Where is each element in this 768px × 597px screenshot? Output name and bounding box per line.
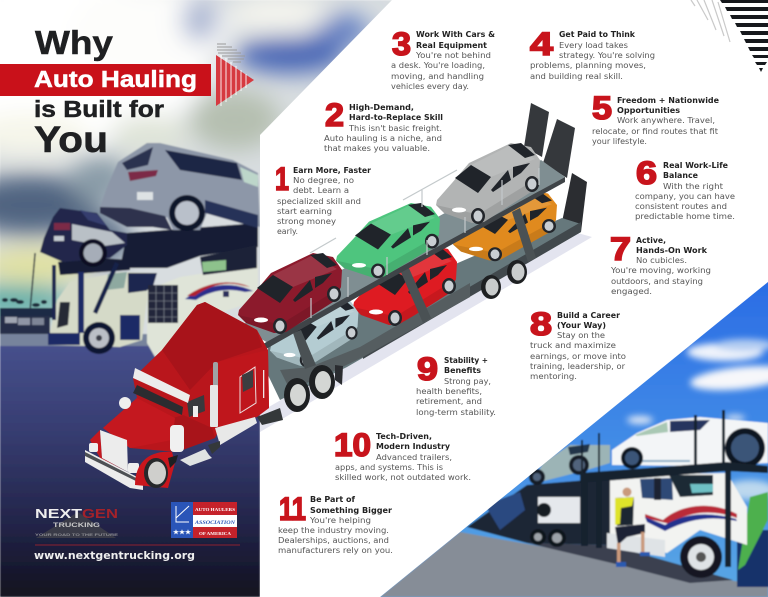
item 7: 7 xyxy=(610,231,631,267)
tractor rear frame xyxy=(280,208,536,412)
orange car xyxy=(453,190,557,261)
logo: NextGen Trucking: NEXT xyxy=(35,506,82,521)
item 4: and building real skill. xyxy=(530,72,623,81)
photo: car hauler under a cloudy sky xyxy=(0,0,400,597)
item 9 xyxy=(416,351,496,417)
item 11: Dealerships, auctions, and xyxy=(278,536,389,545)
red semi tractor xyxy=(85,302,283,490)
ground shadow xyxy=(260,232,592,432)
ground xyxy=(0,345,260,597)
logo: Auto Haulers Association of America: ASSOCIATION xyxy=(194,521,236,526)
item 1: 1 xyxy=(275,161,289,197)
upper ramps xyxy=(524,103,575,178)
item 6: Balance xyxy=(663,171,699,180)
horizon with palms xyxy=(0,253,60,318)
item 8: 8 xyxy=(530,306,552,342)
item 1: Earn More, Faster xyxy=(293,166,371,175)
item 7: You're moving, working xyxy=(610,266,711,275)
item 6: With the right xyxy=(663,182,723,191)
logo: Auto Haulers Association of America: OF AMERICA xyxy=(199,531,232,536)
left trailer xyxy=(467,478,612,547)
trailer wheels xyxy=(481,260,527,299)
heading: You: You xyxy=(34,119,108,160)
item 2: Hard-to-Replace Skill xyxy=(349,113,443,122)
item 4: strategy. You're solving xyxy=(559,51,655,60)
green car xyxy=(336,203,440,278)
item 7: Hands-On Work xyxy=(636,246,708,255)
heading: is Built for: is Built for xyxy=(34,96,164,122)
trailer and vehicles illustration xyxy=(85,103,592,490)
item 1: debt. Learn a xyxy=(293,186,349,195)
item 9: Strong pay, xyxy=(444,377,491,386)
title xyxy=(0,24,211,160)
item 11: You're helping xyxy=(309,516,371,525)
lower car on rack xyxy=(529,444,610,485)
item 4: Get Paid to Think xyxy=(559,30,636,39)
item 11: Something Bigger xyxy=(310,506,392,515)
logo: NextGen Trucking: YOUR ROAD TO THE FUTURE xyxy=(35,533,119,537)
item 8: training, leadership, or xyxy=(530,362,626,371)
item 7: No cubicles. xyxy=(636,256,687,265)
item 8: (Your Way) xyxy=(557,321,606,330)
item 6: predictable home time. xyxy=(635,212,735,221)
parked vehicles xyxy=(0,316,50,334)
item 10: 10 xyxy=(334,427,371,463)
maroon car xyxy=(238,253,342,334)
item 10: apps, and systems. This is xyxy=(335,463,443,472)
decoration: top-right stripes xyxy=(691,0,768,72)
item 4 xyxy=(530,26,655,81)
item 5: 5 xyxy=(592,90,612,126)
item 6: 6 xyxy=(636,155,657,191)
item 3: You're not behind xyxy=(415,51,491,60)
photo: hauler with driver, lower right xyxy=(380,280,768,597)
road xyxy=(380,532,768,597)
item 4: 4 xyxy=(530,26,553,62)
heading: Why: Why xyxy=(35,24,114,61)
item 2: High-Demand, xyxy=(349,103,414,112)
item 9: retirement, and xyxy=(416,397,482,406)
item 9: Stability + xyxy=(444,356,488,365)
item 3: Real Equipment xyxy=(416,41,487,50)
item 5: Work anywhere. Travel, xyxy=(617,116,715,125)
lower photo car xyxy=(40,208,127,267)
item 5: Opportunities xyxy=(617,106,680,115)
item 11: Be Part of xyxy=(310,495,356,504)
guard rails xyxy=(310,168,539,318)
item 8: mentoring. xyxy=(530,372,577,381)
item 2: 2 xyxy=(325,97,344,133)
item 5: your lifestyle. xyxy=(592,137,647,146)
rack beam and poles xyxy=(580,410,768,567)
item 11: manufacturers rely on you. xyxy=(278,546,393,555)
item 10: Tech-Driven, xyxy=(376,432,432,441)
item 6 xyxy=(635,155,735,221)
item 2: that makes you valuable. xyxy=(324,144,430,153)
logo: Auto Haulers Association of America xyxy=(171,502,237,538)
item 11: keep the industry moving. xyxy=(278,526,389,535)
website: www.nextgentrucking.org xyxy=(34,549,195,562)
item 8: truck and maximize xyxy=(530,341,616,350)
item 1: start earning xyxy=(277,207,332,216)
item 3: a desk. You're loading, xyxy=(391,61,485,70)
lower deck side rail xyxy=(363,222,581,359)
photo truck left xyxy=(48,272,157,354)
top white car xyxy=(612,417,768,469)
item 1 xyxy=(275,161,371,236)
item 11: 11 xyxy=(279,491,306,527)
item 9: long-term stability. xyxy=(416,408,496,417)
item 7: Active, xyxy=(636,236,666,245)
item 1: specialized skill and xyxy=(277,197,361,206)
silver car xyxy=(436,143,540,224)
item 6: Real Work-Life xyxy=(663,161,729,170)
item 3: Work With Cars & xyxy=(416,30,495,39)
upper deck edge xyxy=(263,177,565,349)
item 8: Build a Career xyxy=(557,311,620,320)
item 3: 3 xyxy=(392,26,411,62)
item 1: early. xyxy=(277,227,298,236)
item 2: This isn't basic freight. xyxy=(348,124,442,133)
foliage xyxy=(737,492,768,587)
item 7: outdoors, and staying xyxy=(611,277,703,286)
driver xyxy=(615,488,650,567)
logo: NextGen Trucking xyxy=(35,506,119,538)
item 9: 9 xyxy=(417,351,438,387)
item 4: problems, planning moves, xyxy=(530,61,646,70)
rack structure xyxy=(52,223,258,333)
item 10: Advanced trailers, xyxy=(376,453,452,462)
icon: striped red arrow xyxy=(216,44,254,106)
item 8: earnings, or move into xyxy=(530,352,626,361)
item 5: relocate, or find routes that fit xyxy=(592,127,718,136)
item 8 xyxy=(530,306,626,381)
photo truck right xyxy=(147,245,258,357)
item 6: company, you can have xyxy=(635,192,735,201)
divider line xyxy=(35,544,240,546)
item 9: Benefits xyxy=(444,366,481,375)
upper deck xyxy=(240,160,565,343)
item 3: moving, and handling xyxy=(391,72,484,81)
white truck cab xyxy=(607,473,747,578)
item 4: Every load takes xyxy=(559,41,628,50)
item 6: consistent routes and xyxy=(635,202,727,211)
item 7 xyxy=(610,231,711,296)
title banner xyxy=(0,64,211,96)
logo: Auto Haulers Association of America: ★★★ xyxy=(173,529,192,536)
item 10: Modern Industry xyxy=(376,442,451,451)
item 8: Stay on the xyxy=(557,331,605,340)
item 3 xyxy=(391,26,495,91)
item 10 xyxy=(334,427,471,482)
item 2 xyxy=(324,97,443,153)
lower deck xyxy=(268,218,581,400)
item 7: engaged. xyxy=(611,287,652,296)
light blue car xyxy=(270,298,358,367)
heading: Auto Hauling: Auto Hauling xyxy=(34,66,197,92)
item 3: vehicles every day. xyxy=(391,82,469,91)
item 1: strong money xyxy=(277,217,336,226)
upper photo SUV xyxy=(100,143,260,231)
rear lower ramp xyxy=(562,173,587,232)
red lower car xyxy=(353,245,457,326)
logo: NextGen Trucking: TRUCKING xyxy=(53,522,100,529)
logo: NextGen Trucking: GEN xyxy=(82,506,118,521)
item 5: Freedom + Nationwide xyxy=(617,96,720,105)
logo: Auto Haulers Association of America: AUTO HAULERS xyxy=(195,507,236,512)
item 11 xyxy=(278,491,393,555)
item 10: skilled work, not outdated work. xyxy=(335,473,471,482)
item 9: health benefits, xyxy=(416,387,482,396)
item 2: Auto hauling is a niche, and xyxy=(324,134,442,143)
item 1: No degree, no xyxy=(293,176,354,185)
item 5 xyxy=(592,90,720,146)
